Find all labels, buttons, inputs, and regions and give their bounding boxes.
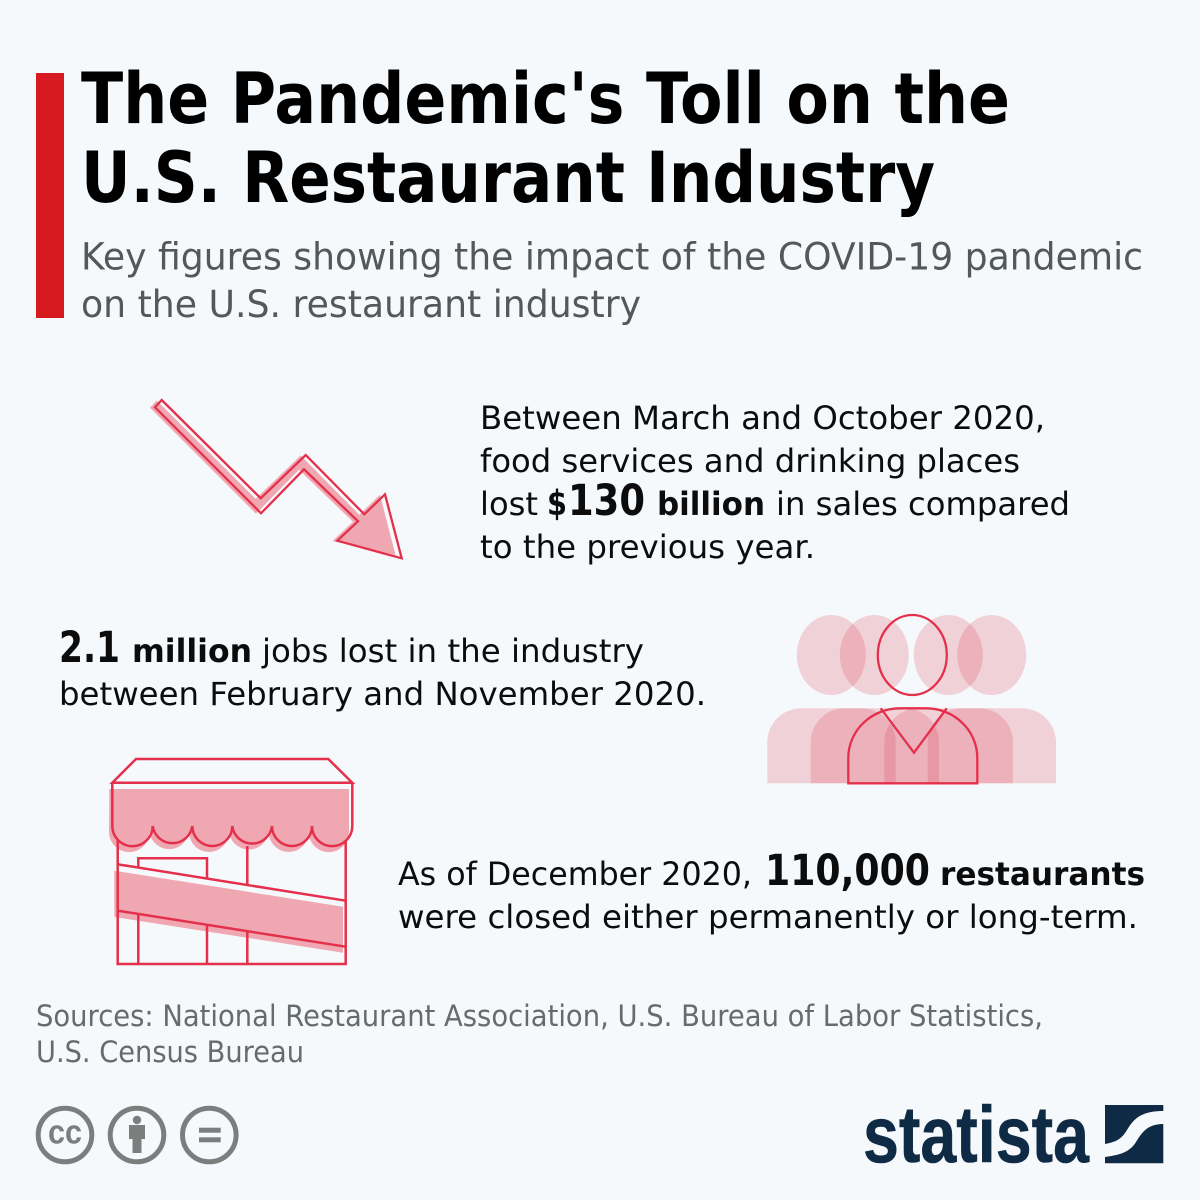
text: jobs lost: 2.1 xyxy=(59,623,120,673)
text: restaurants closed: As of December 2020, xyxy=(398,855,752,893)
sources: U.S. Census Bureau xyxy=(36,1035,304,1069)
icon: attribution xyxy=(110,1108,164,1162)
icon: people xyxy=(767,615,1056,783)
sources xyxy=(36,999,1043,1069)
text: sales loss: to the previous year. xyxy=(480,528,815,566)
icon: falling arrow xyxy=(150,400,402,558)
text: sales loss: Between March and October 2020, xyxy=(480,399,1045,437)
text: sales loss: food services and drinking places xyxy=(480,442,1020,480)
text: jobs lost: between February and November 2020. xyxy=(59,675,706,713)
text: sales loss: in sales compared xyxy=(776,485,1070,523)
sources: Sources: National Restaurant Association, U.S. Bureau of Labor Statistics, xyxy=(36,999,1043,1033)
subtitle: Key figures showing the impact of the COVID-19 pandemic xyxy=(81,236,1143,278)
text: jobs lost: jobs lost in the industry xyxy=(261,632,644,670)
text: sales loss: 130 xyxy=(568,476,645,526)
title xyxy=(81,58,1010,219)
icon: no derivatives xyxy=(182,1108,236,1162)
text: restaurants closed: were closed either permanently or long-term. xyxy=(398,898,1138,936)
text: sales loss: billion xyxy=(657,485,765,523)
text: jobs lost: million xyxy=(132,632,252,670)
statista logo: statista xyxy=(863,1090,1089,1179)
text: restaurants closed: restaurants xyxy=(940,855,1145,893)
subtitle xyxy=(81,236,1143,326)
text: jobs lost xyxy=(59,623,706,713)
text: sales loss xyxy=(480,399,1070,566)
text: restaurants closed: 110,000 xyxy=(765,846,930,896)
icon: closed restaurant xyxy=(109,759,352,964)
text: sales loss: lost xyxy=(480,485,538,523)
icon: creative commons: cc xyxy=(48,1114,82,1152)
subtitle: on the U.S. restaurant industry xyxy=(81,283,641,326)
text: restaurants closed xyxy=(398,846,1145,936)
icon: creative commons xyxy=(38,1108,92,1162)
text: sales loss: $ xyxy=(547,484,567,524)
red title accent bar xyxy=(36,73,64,318)
title: U.S. Restaurant Industry xyxy=(81,137,935,219)
title: The Pandemic's Toll on the xyxy=(81,58,1010,140)
